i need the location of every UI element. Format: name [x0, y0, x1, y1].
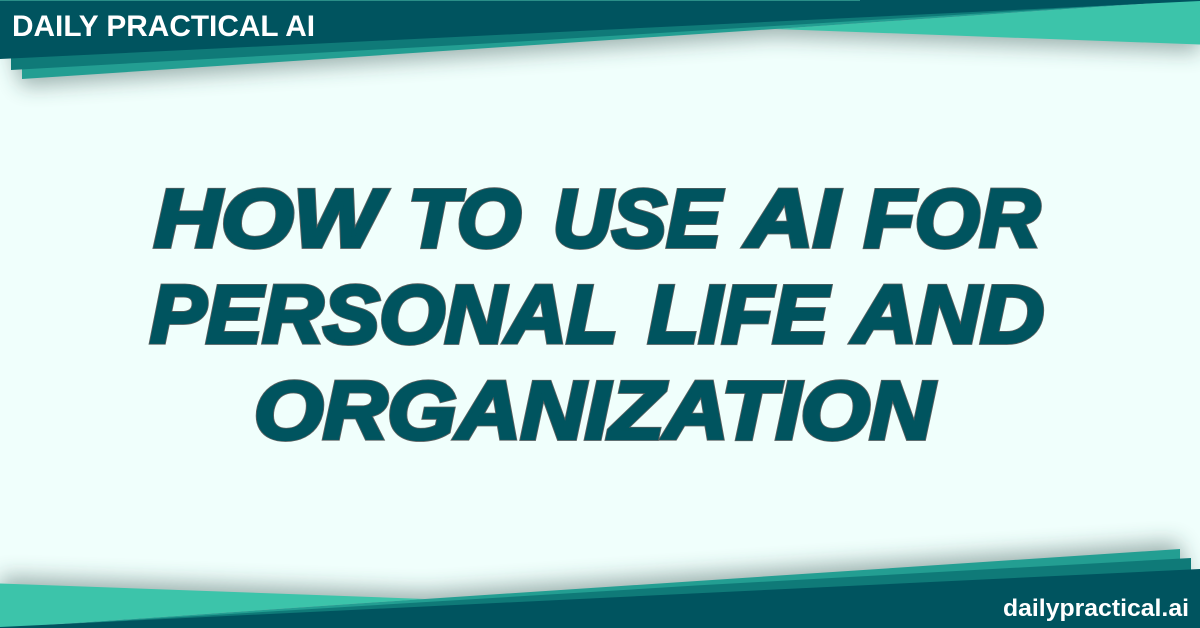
title: AI [744, 174, 842, 264]
brand name: DAILY PRACTICAL AI [12, 10, 315, 43]
title: ORGANIZATION [254, 366, 936, 456]
title: TO [408, 174, 521, 264]
title [150, 174, 1044, 456]
title: USE [553, 174, 723, 264]
title: HOW [154, 174, 388, 264]
bottom banner [0, 542, 1200, 628]
title: ORGANIZATION [254, 366, 936, 456]
title: AND [851, 270, 1044, 360]
title: AI [744, 174, 842, 264]
light teal layer [0, 549, 1180, 628]
dark band [0, 569, 1200, 628]
title: PERSONAL [150, 270, 618, 360]
green corner wedge [775, 0, 1200, 44]
mid teal layer [0, 558, 1191, 628]
light teal layer [22, 0, 1200, 79]
website url: dailypractical.ai [1003, 595, 1189, 622]
title: LIFE [648, 270, 830, 360]
title: PERSONAL [150, 270, 618, 360]
title: HOW [154, 174, 388, 264]
title: AND [851, 270, 1044, 360]
dark band [0, 0, 1200, 59]
top banner [0, 0, 1200, 86]
title: LIFE [648, 270, 830, 360]
mid teal layer [11, 0, 1200, 70]
green corner wedge [0, 584, 425, 628]
title: USE [553, 174, 723, 264]
title: TO [408, 174, 521, 264]
title: FOR [864, 174, 1040, 264]
title: FOR [864, 174, 1040, 264]
